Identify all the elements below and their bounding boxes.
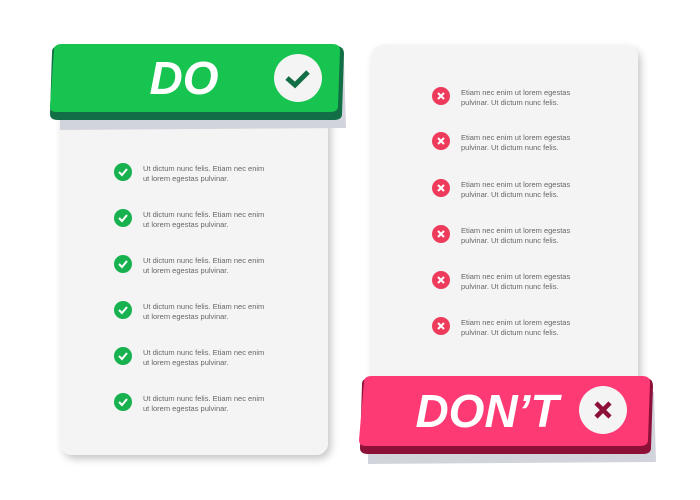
do items: Ut dictum nunc felis. Etiam nec enim	[143, 348, 264, 357]
icon: check circle	[274, 54, 322, 102]
do items: ut lorem egestas pulvinar.	[143, 174, 228, 183]
do items: Ut dictum nunc felis. Etiam nec enim	[143, 164, 264, 173]
dont items: pulvinar. Ut dictum nunc felis.	[461, 282, 559, 291]
do items: Ut dictum nunc felis. Etiam nec enim	[143, 210, 264, 219]
dont items: Etiam nec enim ut lorem egestas	[461, 226, 570, 235]
dont items: pulvinar. Ut dictum nunc felis.	[461, 98, 559, 107]
do items: ut lorem egestas pulvinar.	[143, 312, 228, 321]
dont items: Etiam nec enim ut lorem egestas	[461, 272, 570, 281]
do items: ut lorem egestas pulvinar.	[143, 266, 228, 275]
banner: DONT: DON’T	[415, 385, 562, 437]
dont items: Etiam nec enim ut lorem egestas	[461, 318, 570, 327]
do items: ut lorem egestas pulvinar.	[143, 220, 228, 229]
banner: DONT	[359, 376, 656, 464]
do items: ut lorem egestas pulvinar.	[143, 358, 228, 367]
banner: DO: DO	[150, 52, 219, 104]
panel: dont card	[371, 45, 638, 405]
panel: do card	[60, 90, 328, 455]
dont items	[432, 87, 570, 337]
dont items: pulvinar. Ut dictum nunc felis.	[461, 143, 559, 152]
dont items: Etiam nec enim ut lorem egestas	[461, 133, 570, 142]
dont items: Etiam nec enim ut lorem egestas	[461, 180, 570, 189]
dont items: pulvinar. Ut dictum nunc felis.	[461, 190, 559, 199]
do items: Ut dictum nunc felis. Etiam nec enim	[143, 302, 264, 311]
do items: ut lorem egestas pulvinar.	[143, 404, 228, 413]
do items	[114, 163, 264, 413]
do items: Ut dictum nunc felis. Etiam nec enim	[143, 256, 264, 265]
banner: DO	[50, 44, 346, 130]
do items: Ut dictum nunc felis. Etiam nec enim	[143, 394, 264, 403]
icon: x circle	[579, 386, 627, 434]
dont items: Etiam nec enim ut lorem egestas	[461, 88, 570, 97]
dont items: pulvinar. Ut dictum nunc felis.	[461, 328, 559, 337]
dont items: pulvinar. Ut dictum nunc felis.	[461, 236, 559, 245]
